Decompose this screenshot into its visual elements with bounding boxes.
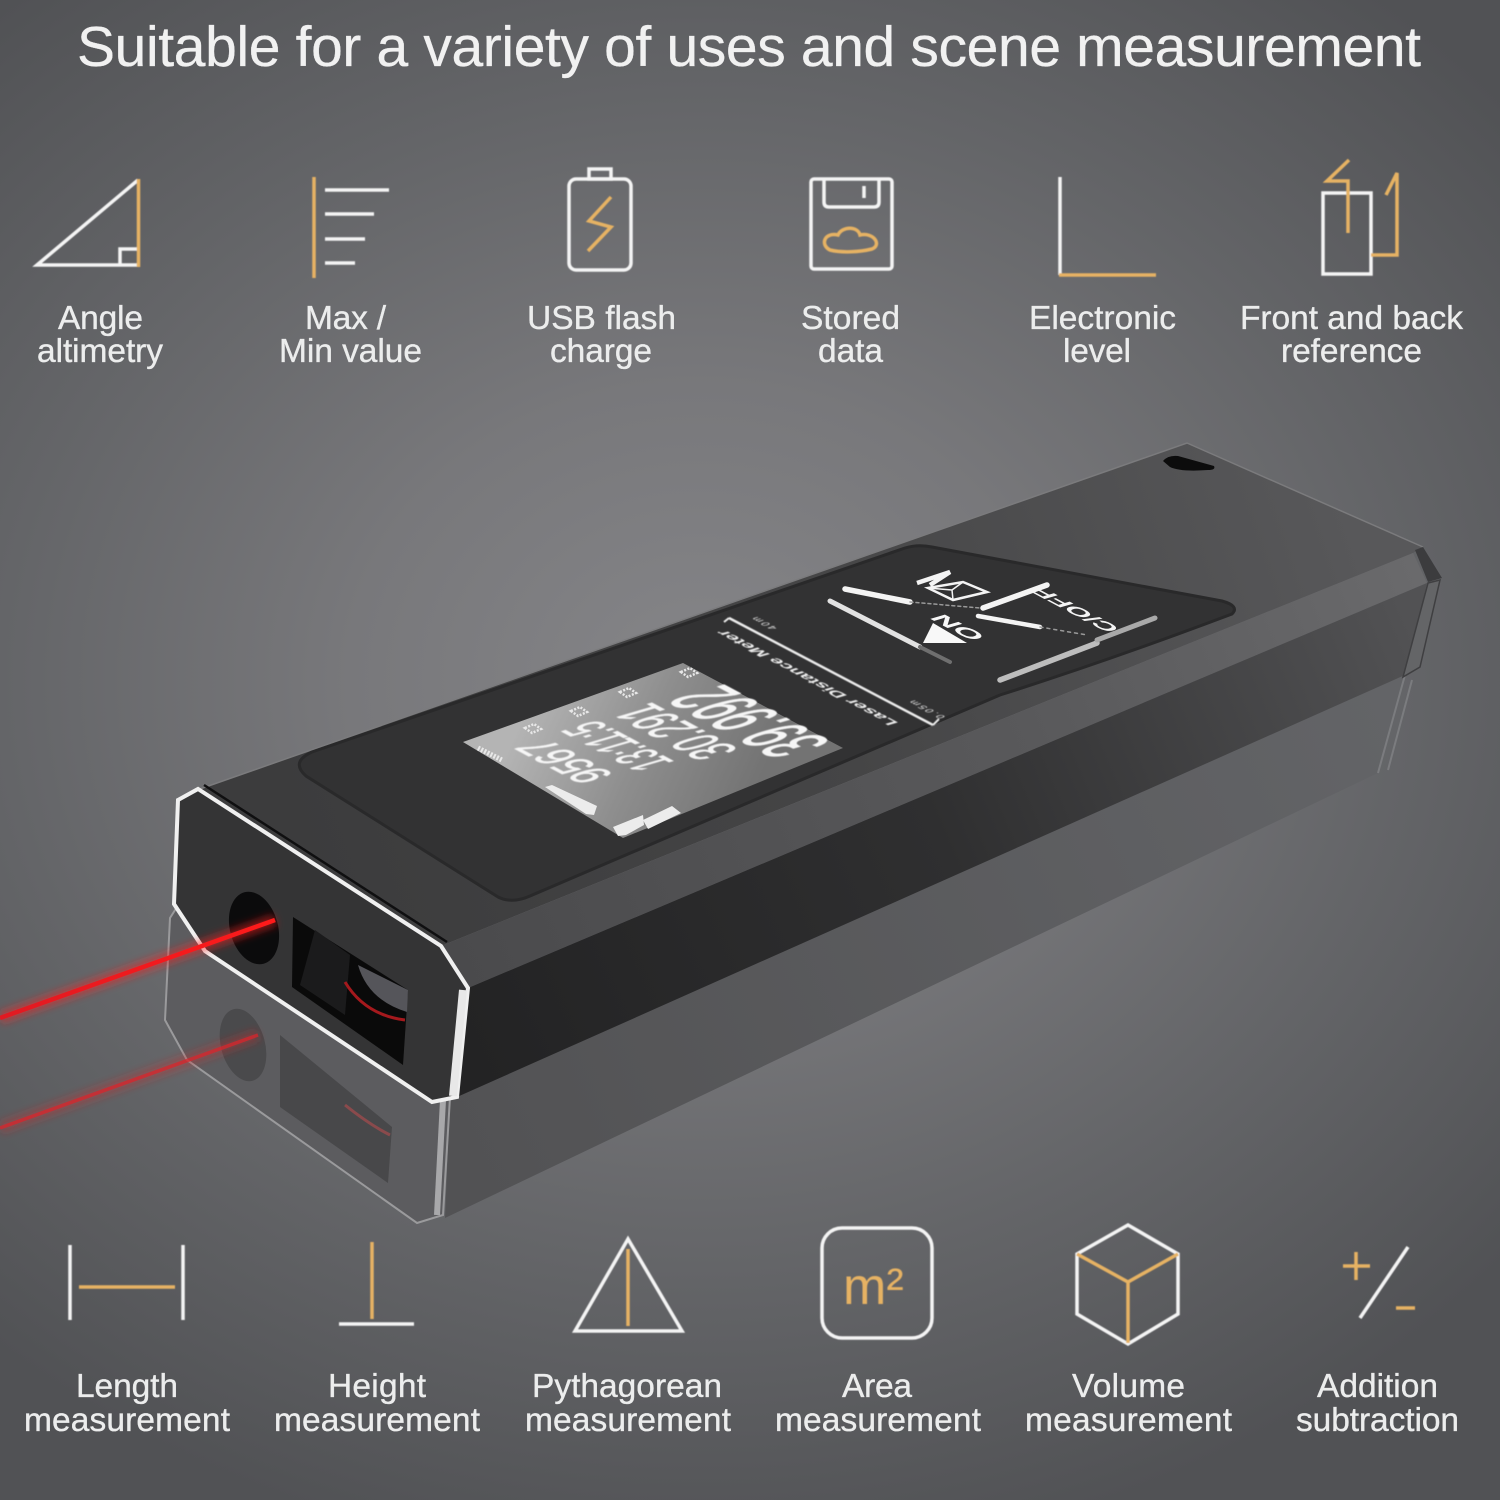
back edge highlight (197, 443, 1423, 790)
label: angle altimetry: altimetry (37, 333, 163, 370)
product: laser distance meter (0, 443, 1442, 1223)
laser aperture (221, 886, 287, 970)
label: area measurement: measurement (775, 1402, 982, 1439)
feature: length measurement (24, 1245, 231, 1439)
icon: triangle with altitude (575, 1239, 682, 1331)
label: front and back reference: Front and back (1240, 300, 1463, 337)
feature: max min value (279, 177, 422, 370)
lcd readings (503, 678, 851, 788)
label: height measurement: measurement (274, 1402, 481, 1439)
label: height measurement: Height (328, 1368, 427, 1405)
icon: triangle (37, 179, 138, 267)
printed ruler and model text: Laser Distance Meter (712, 629, 903, 727)
label: pythagorean measurement: measurement (525, 1402, 732, 1439)
lcd battery (545, 785, 681, 836)
lcd readings: 39.992 (648, 678, 851, 765)
sensor window (292, 917, 408, 1065)
lcd readings: 13:11:5 (548, 716, 687, 776)
icon: height (339, 1242, 414, 1324)
icon: scale lines (314, 177, 389, 278)
label: addition subtraction: subtraction (1296, 1402, 1459, 1439)
end chamfer (1415, 547, 1442, 582)
label: front and back reference (1240, 300, 1463, 370)
label: usb flash charge (527, 300, 676, 370)
label: pythagorean measurement (525, 1368, 732, 1439)
label: area measurement (775, 1368, 982, 1439)
label: front and back reference: reference (1281, 333, 1422, 370)
reflected laser beam (0, 1035, 258, 1128)
label: electronic level (1029, 300, 1176, 370)
top face (197, 443, 1423, 946)
label: electronic level: level (1063, 333, 1131, 370)
label: angle altimetry: Angle (58, 300, 143, 337)
reflection of device (165, 675, 1412, 1223)
side face (457, 583, 1427, 1097)
feature: height measurement (274, 1242, 481, 1439)
button label: c off: C/OFF (1027, 586, 1126, 634)
label: addition subtraction: Addition (1317, 1368, 1438, 1405)
label: volume measurement (1025, 1368, 1233, 1439)
laser beam (0, 920, 275, 1018)
feature: electronic level (1029, 177, 1176, 370)
printed ruler and model text: 0.05m (907, 699, 949, 719)
label: max min value: Max / (305, 300, 387, 337)
end strip (1403, 580, 1440, 677)
label: volume measurement: measurement (1025, 1402, 1233, 1439)
icon: square metre: m² (843, 1258, 904, 1316)
feature: addition subtraction (1296, 1247, 1459, 1439)
feature: area measurement (775, 1228, 982, 1439)
label: area measurement: Area (842, 1368, 912, 1405)
label: stored data: Stored (801, 300, 900, 337)
label: height measurement (274, 1368, 481, 1439)
hanging hole (1163, 456, 1214, 471)
mode icon (917, 572, 987, 600)
label: max min value (279, 300, 422, 370)
label: electronic level: Electronic (1029, 300, 1176, 337)
feature: angle altimetry (37, 179, 163, 370)
label: stored data: data (818, 333, 883, 370)
feature: pythagorean measurement (525, 1239, 732, 1439)
label: addition subtraction (1296, 1368, 1459, 1439)
button pad (830, 572, 1155, 680)
label: stored data (801, 300, 900, 370)
feature: front and back reference (1240, 160, 1463, 370)
label: pythagorean measurement: Pythagorean (532, 1368, 722, 1405)
button label: on: ON (924, 612, 992, 643)
lcd readings: 30.291 (598, 698, 752, 765)
label: max min value: Min value (279, 333, 422, 370)
lcd small markers (478, 668, 697, 760)
title: Suitable for a variety of uses and scene measurement (77, 15, 1421, 79)
lcd readings: 9567 (503, 735, 626, 788)
power icon triangle (923, 623, 967, 643)
printed ruler and model text (712, 616, 949, 727)
feature: volume measurement (1025, 1225, 1233, 1439)
label: volume measurement: Volume (1072, 1368, 1185, 1405)
label: length measurement: measurement (24, 1402, 231, 1439)
feature: usb flash charge (527, 169, 676, 370)
icon: floppy disk (811, 179, 892, 269)
chamfer band (441, 553, 1427, 988)
icon: battery (569, 169, 631, 270)
front face (174, 785, 468, 1102)
label: usb flash charge: USB flash (527, 300, 676, 337)
printed ruler and model text: 40m (749, 616, 781, 630)
feature: stored data (801, 179, 900, 370)
label: length measurement (24, 1368, 231, 1439)
screen panel (299, 546, 1234, 900)
label: length measurement: Length (76, 1368, 178, 1405)
lcd screen (463, 663, 851, 838)
icon: plus and minus (1343, 1247, 1415, 1318)
icon: cube (1077, 1225, 1178, 1344)
label: angle altimetry (37, 300, 163, 370)
icon: length (70, 1245, 183, 1320)
icon: right angle (1059, 177, 1156, 275)
icon: front and back arrows (1323, 160, 1397, 274)
label: usb flash charge: charge (550, 333, 652, 370)
icon: square metre (822, 1228, 932, 1338)
